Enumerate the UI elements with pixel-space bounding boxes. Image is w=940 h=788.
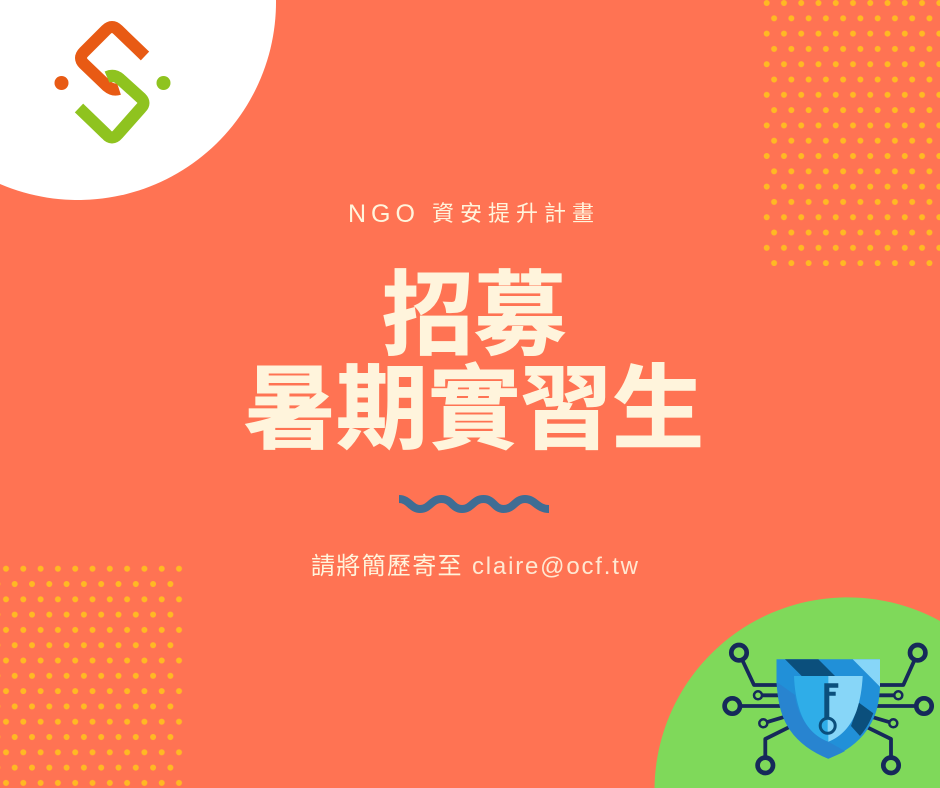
logo: linked diamonds [54, 27, 170, 138]
circuit nodes [725, 645, 932, 773]
contact line: claire@ocf.tw [472, 553, 640, 580]
shield top-right highlight [853, 659, 880, 687]
shield top band [785, 659, 835, 676]
wave divider [399, 499, 549, 509]
shield body [776, 659, 880, 759]
title [244, 265, 704, 461]
shield lower-right band [851, 703, 873, 736]
shield lower-left shade [777, 682, 845, 759]
subtitle [348, 200, 600, 228]
inner shield [794, 676, 828, 742]
contact line [311, 553, 640, 580]
circuit lines [732, 653, 924, 765]
subtitle: NGO [348, 200, 420, 228]
key [820, 683, 838, 733]
title: 暑期實習生 [244, 359, 704, 461]
subtitle: 資安提升計畫 [432, 201, 600, 226]
green corner circle [654, 597, 940, 788]
title: 招募 [382, 265, 566, 367]
white corner circle [0, 0, 276, 200]
dot pattern: bottom left [0, 565, 184, 788]
icon: circuit shield with key [725, 645, 932, 773]
dot pattern: top right [763, 0, 940, 266]
contact line: 請將簡歷寄至 [311, 553, 463, 580]
